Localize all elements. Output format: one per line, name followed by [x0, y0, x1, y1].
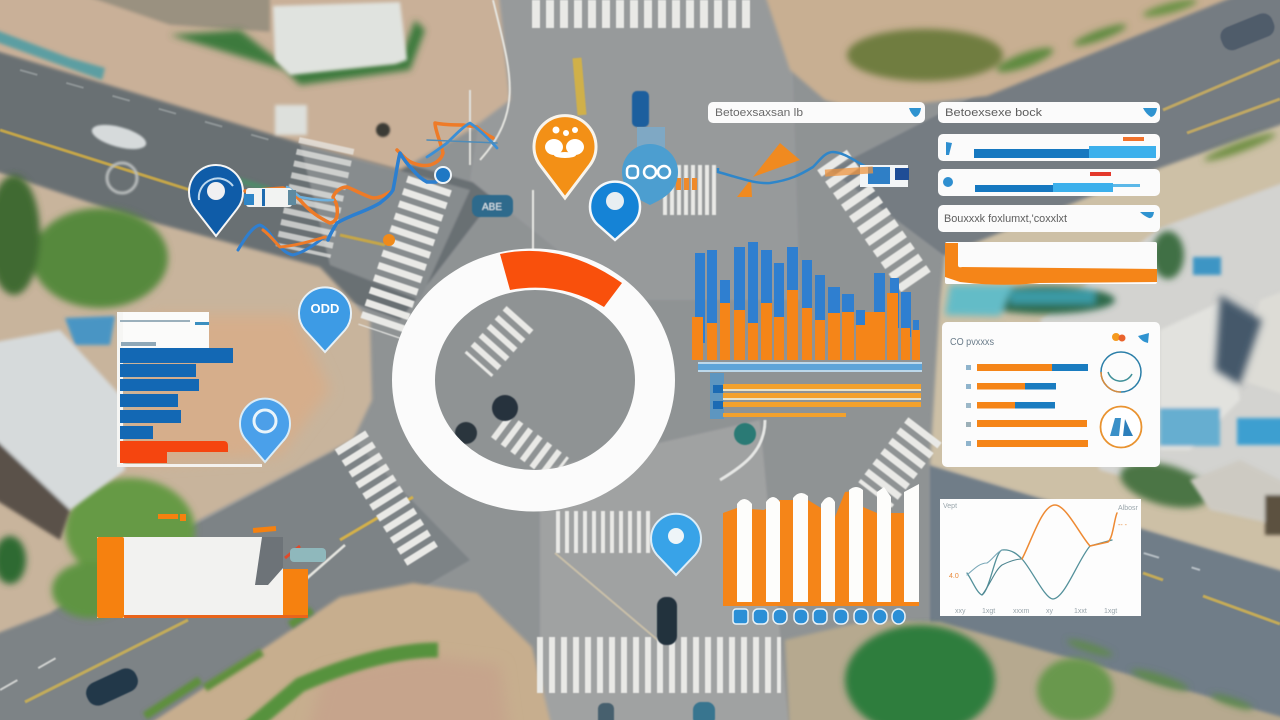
orange dot [383, 234, 395, 246]
panel: legend pill with text [938, 205, 1160, 232]
donut chart [392, 249, 675, 511]
line chart: top right squiggle with triangles [718, 143, 909, 197]
bar chart: orange and white columns [723, 484, 919, 624]
blue segments [695, 242, 919, 343]
car: teal island [734, 423, 756, 445]
car: dark lower left [82, 665, 142, 709]
panel bars [120, 348, 233, 439]
panel heading: CO pvxxxs [950, 337, 994, 348]
bottom right block [785, 620, 1280, 720]
left block [0, 166, 372, 640]
map pin: bright blue [590, 182, 640, 240]
car: dark in donut small [455, 422, 477, 444]
chart labels: 1xxt [1074, 608, 1087, 615]
car: bottom a [598, 703, 614, 720]
line chart: top left squiggle [238, 123, 497, 255]
white car by card [290, 548, 326, 562]
panel: legend pill with text: Bouxxxk foxlumxt,'coxxlxt [944, 213, 1067, 225]
panel: legend pill top right [938, 102, 1160, 123]
axis label strip [698, 362, 922, 372]
stacked bar chart: upper right [692, 242, 922, 372]
small orange tags [158, 514, 276, 533]
panel orange bars [120, 441, 228, 463]
orange triangle large [753, 143, 800, 177]
panel: orange corner card [945, 242, 1157, 285]
small blue marker [435, 167, 451, 183]
white columns [737, 484, 919, 602]
map pin: mid blue: ODD [311, 301, 339, 316]
donut highlighted segment [500, 251, 622, 307]
chart labels: -- - [1118, 522, 1128, 529]
soft earth tones [125, 315, 510, 720]
car: bottom b [693, 702, 715, 720]
panel: legend pill top middle [708, 102, 925, 123]
icon ring orange [1100, 406, 1142, 448]
icon row [733, 609, 905, 624]
icon ring teal [1101, 352, 1141, 392]
chart labels: 4.0 [949, 573, 959, 580]
map pin: mid blue [299, 287, 351, 352]
panel: line chart [940, 499, 1141, 616]
panel: progress row 2 [938, 169, 1160, 196]
chart labels: xy [1046, 608, 1054, 615]
white data tag [246, 188, 292, 207]
bottom left block [125, 583, 555, 720]
orange area [723, 490, 919, 606]
map pin: sky blue bottom [651, 514, 701, 575]
car: top right [1217, 10, 1277, 53]
map pin: sky blue left [240, 399, 290, 462]
panel: horizontal bars with icons [942, 322, 1160, 467]
car: teal labelled: ABE [482, 202, 502, 213]
orange stripes on crosswalk block [676, 178, 697, 190]
teal strip top left [0, 24, 105, 80]
chart labels: 1xgt [982, 608, 995, 615]
chart labels: Vept [943, 503, 957, 510]
top right block [760, 0, 1275, 110]
panel: legend pill top right: Betoexsexe bock [945, 107, 1043, 119]
chart labels: 1xgt [1104, 608, 1117, 615]
white and blue tag [860, 165, 908, 187]
panel: bottom left orange card [97, 514, 326, 618]
panel badges [1112, 333, 1149, 343]
map pin: navy [189, 165, 243, 236]
donut ring [392, 249, 675, 511]
car: blue top [632, 91, 649, 127]
panel: legend pill top middle: Betoexsaxsan lb [715, 107, 803, 119]
top left block [0, 0, 510, 170]
chart labels [943, 503, 1139, 615]
white building top [273, 2, 407, 75]
chart labels: Albosr [1118, 505, 1139, 512]
car: teal labelled [472, 195, 513, 217]
pale kiosk [275, 105, 307, 135]
map pin: light blue large marker [622, 127, 678, 205]
car: dark in donut [492, 395, 518, 421]
chart labels: xxxm [1013, 608, 1030, 615]
crosswalks [303, 14, 925, 665]
right block [930, 118, 1280, 576]
map pin: orange [534, 116, 596, 198]
panel: left horizontal bar chart [117, 312, 262, 467]
panel: progress row 1 [938, 134, 1160, 161]
horizontal orange lines chart [710, 373, 921, 419]
orange segments [692, 290, 920, 360]
white car and bicycle marks [89, 120, 390, 193]
orange triangle small [737, 179, 752, 197]
grass strips bottom left [145, 610, 312, 716]
chart lines [967, 505, 1117, 599]
bars [966, 364, 1088, 447]
chart labels: xxy [955, 608, 966, 615]
left building [0, 330, 125, 510]
car: dark bottom [657, 597, 677, 645]
right buildings [1160, 300, 1240, 450]
